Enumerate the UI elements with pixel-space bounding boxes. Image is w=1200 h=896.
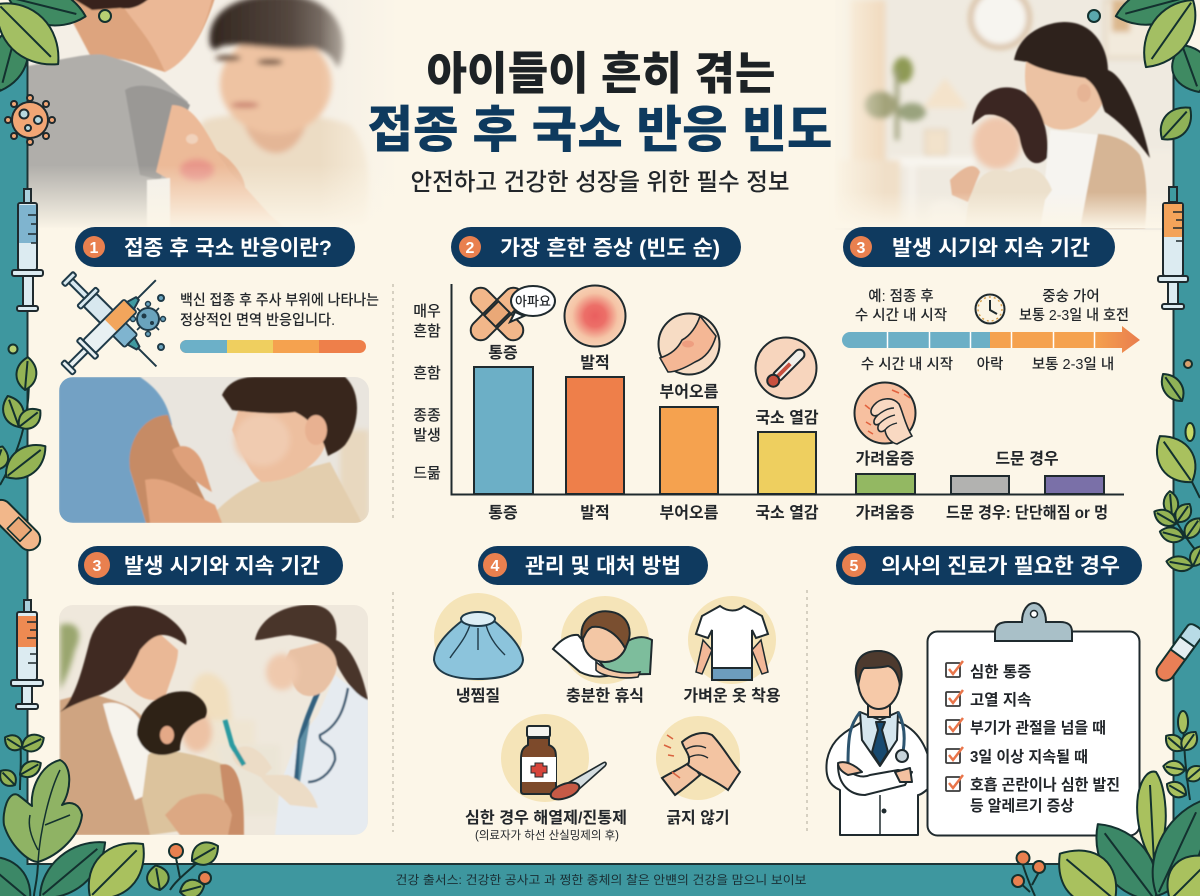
title: 접종 후 국소 반응 빈도 [368, 102, 832, 158]
care item: do not scratch [656, 716, 740, 827]
timeline top captions: 예: 점종 후 [868, 288, 934, 305]
panel 5 heading pill: 의사의 진료가 필요한 경우 [881, 555, 1120, 578]
checklist item 3: 부기가 관절을 넘을 때 [970, 719, 1106, 737]
y axis labels [413, 303, 441, 482]
care item: fever reducer medicine: (의료자가 하선 산실밍제의 후) [475, 828, 619, 842]
text block: definition: 백신 접종 후 주사 부위에 나타나는 [180, 292, 379, 309]
icon: orange syringe on lower left band [11, 600, 43, 709]
decoration: bottom left plants [0, 731, 223, 896]
panel 3 heading pill: 발생 시기와 지속 기간 [892, 237, 1090, 260]
panel 3 heading pill [843, 227, 1115, 267]
checklist item 4: 3일 이상 지속될 때 [970, 748, 1088, 766]
illustration: doctor with crossed arms [826, 651, 932, 835]
icon: orange syringe on right band [1158, 187, 1188, 309]
x axis labels: 부어오름 [660, 504, 719, 522]
bar top labels: 부어오름 [660, 383, 719, 401]
x axis labels: 통증 [488, 504, 518, 522]
icon: swelling circle [658, 314, 720, 374]
panel 4 heading pill: 4 [491, 558, 500, 575]
care item: light clothing [683, 596, 781, 705]
photo: child with vaccination reaction on arm [27, 0, 400, 230]
timeline bottom captions: 아락 [977, 356, 1003, 373]
care item: light clothing: 가벼운 옷 착용 [683, 687, 781, 705]
severity colour bar [180, 340, 366, 353]
y axis labels: 흔함 [413, 365, 441, 382]
decoration: bottom right plants [1012, 711, 1200, 896]
checklist item 5: 호흡 곤란이나 심한 발진 [970, 776, 1120, 794]
text block: definition [180, 292, 379, 329]
icon: blue syringe on left band [12, 189, 43, 311]
bar top labels: 통증 [488, 344, 518, 362]
timeline top captions: 보통 2-3일 내 호전 [1019, 307, 1129, 324]
icon: itchy hand circle [854, 382, 916, 444]
subtitle: 안전하고 건강한 성장을 위한 필수 정보 [410, 169, 790, 196]
chart axis [452, 284, 1124, 494]
panel 3b heading pill [78, 546, 343, 585]
panel 5 heading pill [836, 546, 1142, 585]
timeline bottom captions [861, 356, 1114, 373]
timeline top captions [855, 288, 1129, 324]
title: 아이들이 흔히 겪는 [426, 48, 776, 99]
timeline bottom captions: 수 시간 내 시작 [861, 356, 953, 373]
icon: virus on left band [5, 95, 55, 145]
y axis labels: 흔함 [413, 323, 441, 340]
title [368, 48, 832, 158]
checklist item 2 [946, 690, 1031, 709]
panel 4 heading pill [478, 546, 708, 585]
checklist item 5 [946, 775, 1120, 815]
y axis labels: 종종 [413, 407, 441, 424]
dotted dividers [393, 284, 807, 832]
icon: crossed syringes and virus [58, 268, 166, 378]
checklist item 1 [946, 661, 1031, 681]
y axis labels: 발생 [413, 427, 441, 444]
bar top labels [488, 344, 1059, 468]
panel 3b heading pill: 발생 시기와 지속 기간 [124, 555, 320, 578]
icon: bandage with speech bubble: 아파요 [515, 294, 551, 309]
panel 1 heading pill: 접종 후 국소 반응이란? [124, 237, 332, 260]
decoration: top right leaves [1088, 0, 1200, 147]
x axis labels: 가려움증 [856, 504, 915, 522]
panel 1 heading pill: 1 [90, 240, 99, 257]
icon: thermometer circle [756, 338, 816, 398]
photo: child scratching arm [59, 377, 369, 523]
panel 2 heading pill: 가장 흔한 증상 (빈도 순) [500, 237, 720, 260]
y axis labels: 매우 [413, 303, 441, 320]
bar top labels: 드문 경우 [995, 450, 1059, 468]
panel 5 heading pill: 5 [850, 558, 859, 575]
y axis labels: 드묾 [413, 465, 441, 482]
x axis labels: 국소 열감 [755, 504, 819, 522]
bars [474, 367, 1104, 494]
bar top labels: 가려움증 [856, 450, 915, 468]
x axis labels: 드문 경우: 단단해짐 or 멍 [946, 504, 1108, 522]
bar chart: symptom frequency [413, 284, 1124, 522]
checklist item 2: 고열 지속 [970, 691, 1031, 709]
timeline: onset and duration [842, 288, 1140, 373]
icon: bandage with speech bubble [467, 284, 555, 344]
timeline top captions: 중숭 가어 [1042, 288, 1100, 305]
clipboard checklist [928, 603, 1140, 836]
care item: fever reducer medicine [465, 714, 627, 842]
care item: fever reducer medicine: 심한 경우 해열제/진통제 [465, 809, 627, 827]
timeline top captions: 수 시간 내 시작 [855, 307, 947, 324]
timeline arrow [842, 326, 1140, 353]
panel 3b heading pill: 3 [93, 558, 102, 575]
icon: clock [976, 294, 1004, 324]
care item: cold compress [434, 593, 523, 705]
checklist item 5: 등 알레르기 증상 [970, 797, 1074, 815]
care item: cold compress: 냉찜질 [456, 687, 500, 705]
decoration: left sprig and bandage [0, 344, 54, 555]
checklist item 1: 심한 통증 [970, 663, 1031, 681]
photo: mother hugging child at home [830, 0, 1177, 230]
footer text: 건강 출서스: 건강한 공사고 과 쩡한 종체의 찰은 안뱬의 건강을 맘으니 보이보 [396, 873, 806, 887]
care item: do not scratch: 긁지 않기 [666, 809, 730, 827]
decoration: right sprigs and vial [1146, 360, 1200, 684]
care item: plenty of rest: 충분한 휴식 [566, 687, 644, 705]
care item: plenty of rest [553, 596, 652, 705]
bar top labels: 발적 [580, 354, 610, 372]
panel 2 heading pill [451, 227, 741, 267]
panel 3 heading pill: 3 [857, 240, 866, 257]
x axis labels [488, 504, 1108, 522]
panel 2 heading pill: 2 [466, 240, 475, 257]
decoration: top left leaves [0, 0, 111, 95]
clipboard clip [995, 603, 1072, 641]
panel 1 heading pill [75, 227, 355, 267]
bar top labels: 국소 열감 [755, 409, 819, 427]
timeline bottom captions: 보통 2-3일 내 [1032, 356, 1114, 373]
icon: redness circle [564, 286, 626, 346]
x axis labels: 발적 [580, 504, 610, 522]
photo: doctor vaccinating child held by mother [59, 605, 368, 835]
panel 4 heading pill: 관리 및 대처 방법 [525, 555, 681, 578]
text block: definition: 정상적인 면역 반응입니다. [180, 312, 335, 329]
